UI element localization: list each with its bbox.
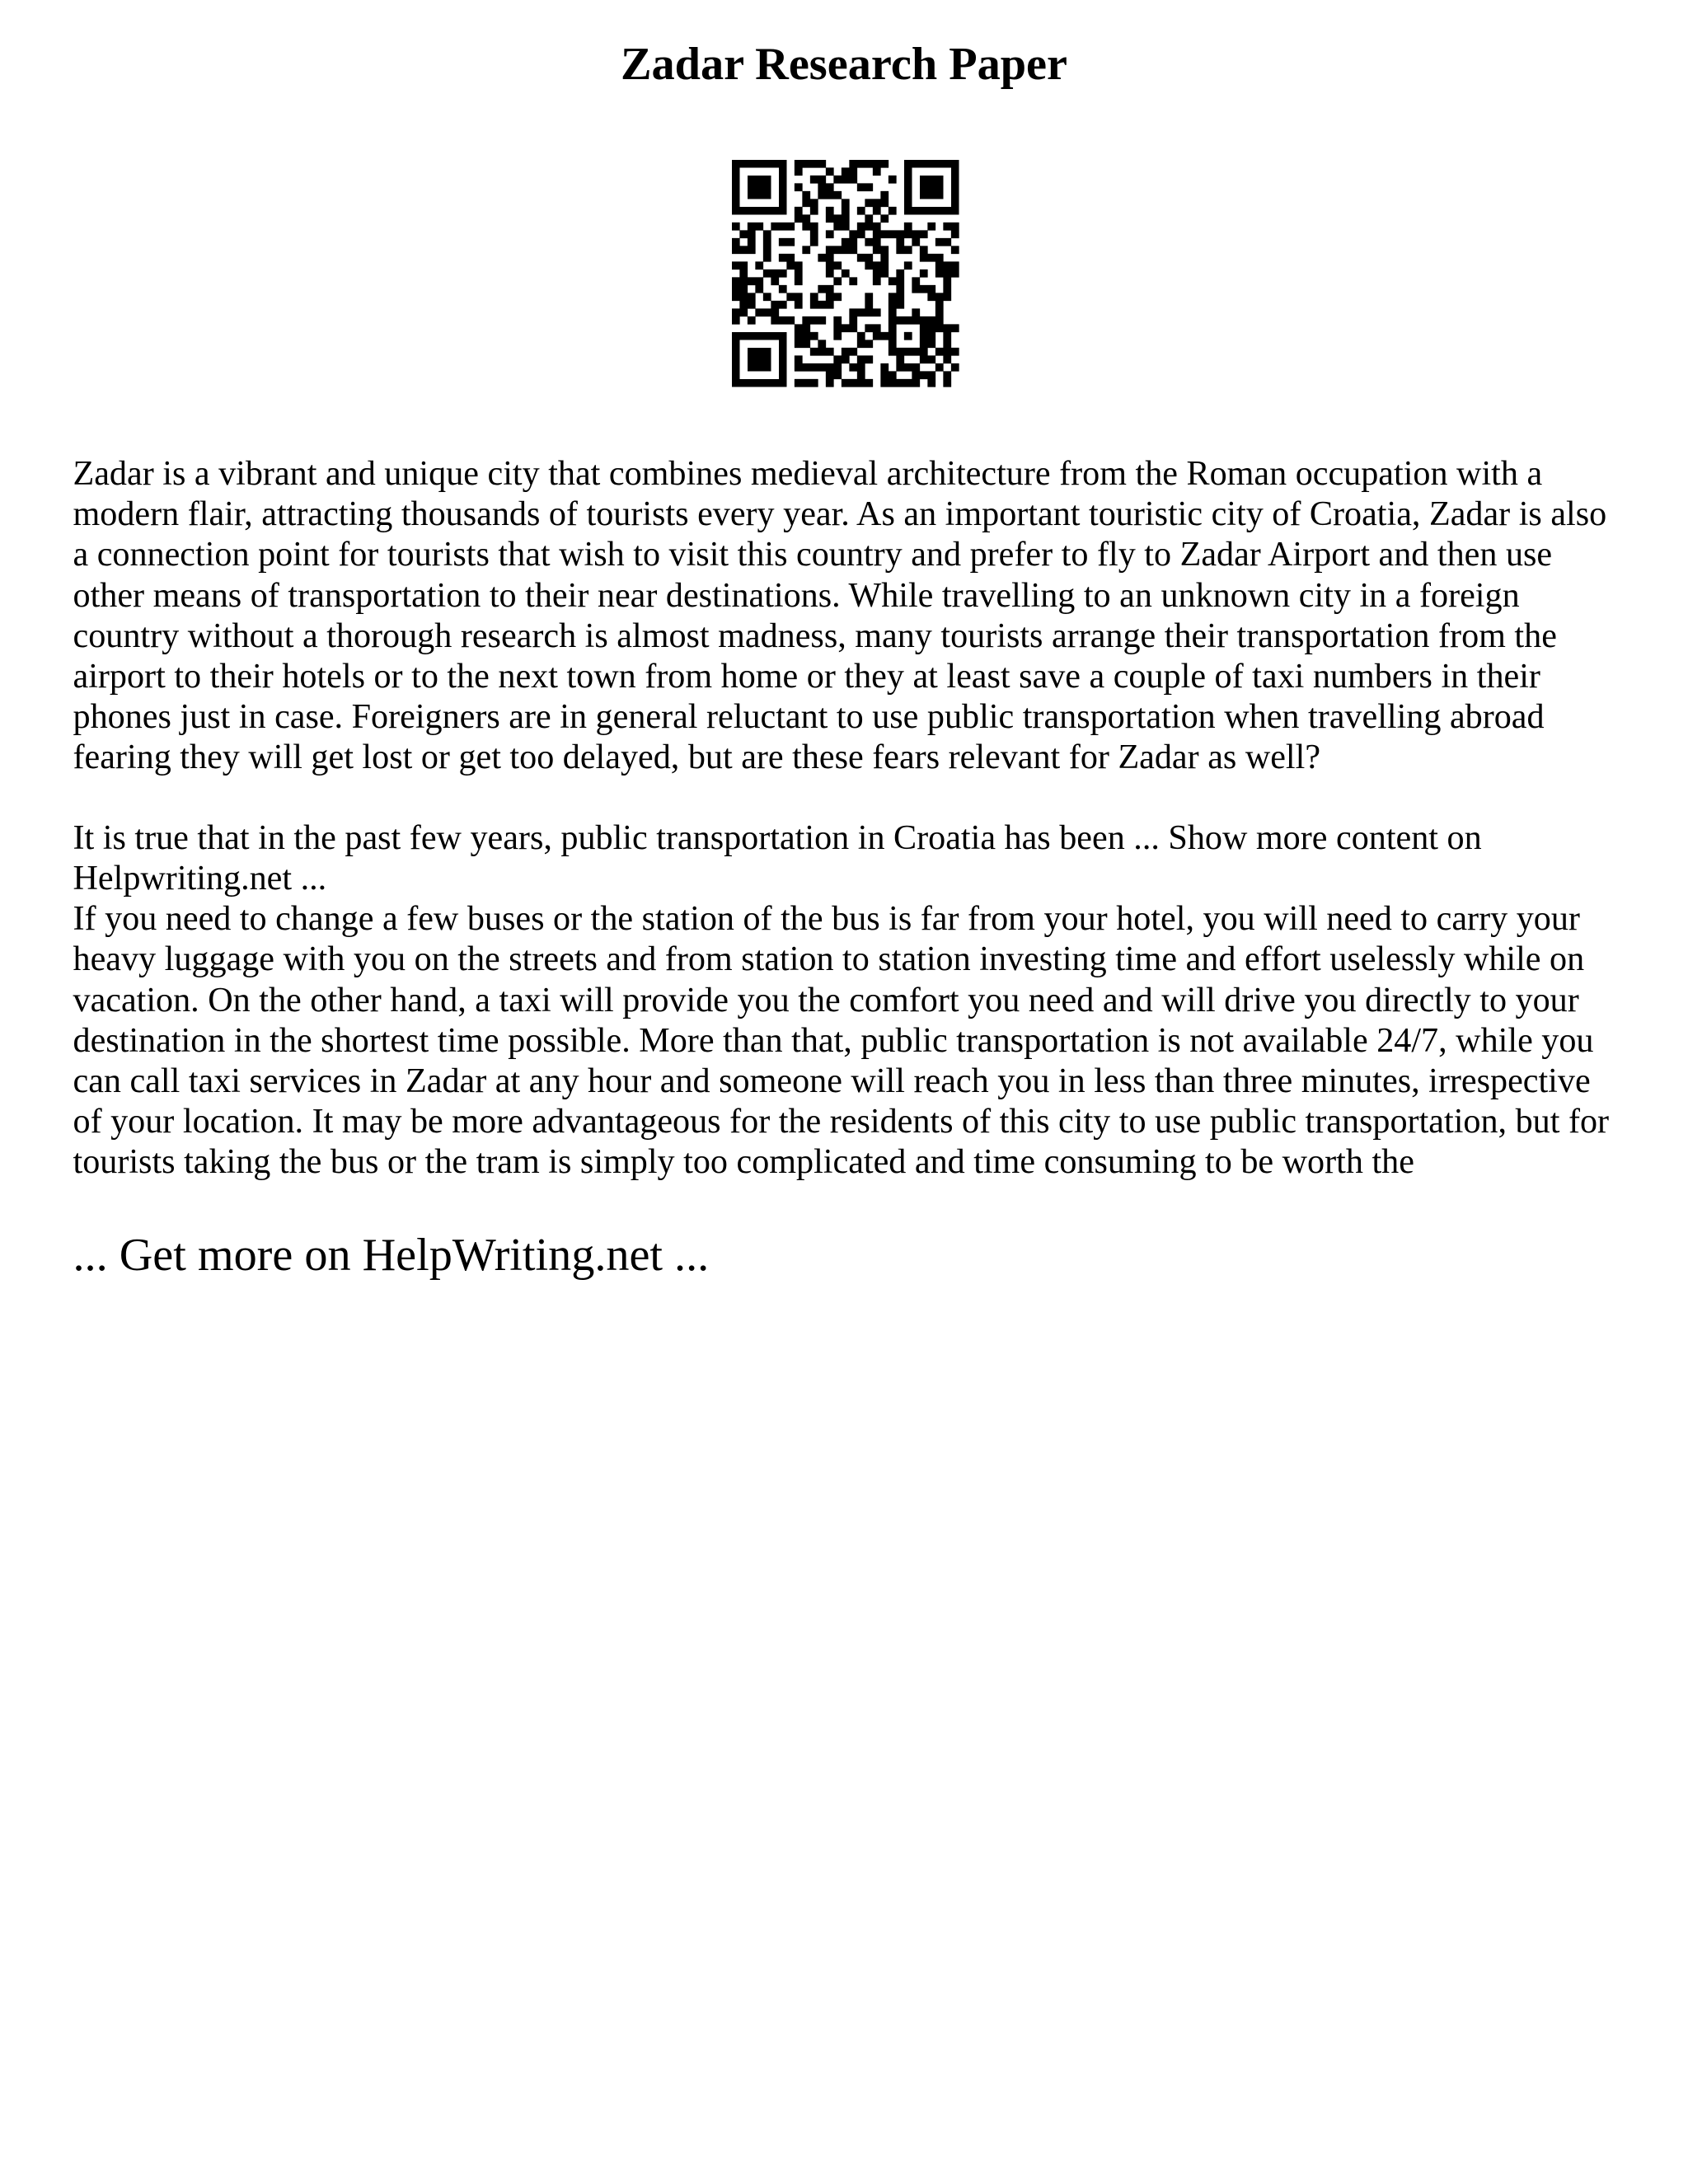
text block: second paragraph: It is true that in the past few years, public transportation in Croatia has been ... Show more content on [73, 818, 1482, 857]
text block: introduction paragraph: Zadar is a vibrant and unique city that combines medieval architecture from the Roman occupation with a [73, 454, 1542, 493]
text block: second paragraph: destination in the shortest time possible. More than that, public transportation is not available 24/7, while you [73, 1021, 1594, 1060]
text block: second paragraph: tourists taking the bus or the tram is simply too complicated and time consuming to be worth the [73, 1142, 1414, 1181]
text block: introduction paragraph: airport to their hotels or to the next town from home or they at least save a couple of taxi numbers in their [73, 657, 1540, 696]
text block: second paragraph: Helpwriting.net ... [73, 859, 326, 898]
text block: second paragraph: of your location. It may be more advantageous for the residents of this city to use public transportation, but for [73, 1102, 1609, 1141]
text block: introduction paragraph: country without a thorough research is almost madness, many tourists arrange their transportation from the [73, 616, 1557, 655]
text block: introduction paragraph: other means of transportation to their near destinations. While travelling to an unknown city in a foreign [73, 576, 1520, 615]
text block: introduction paragraph: phones just in case. Foreigners are in general reluctant to use public transportation when travelling abroad [73, 697, 1545, 736]
text block: second paragraph [73, 818, 1609, 1181]
text block: second paragraph: vacation. On the other hand, a taxi will provide you the comfort you need and will drive you directly to your [73, 981, 1579, 1019]
text block: introduction paragraph: modern flair, attracting thousands of tourists every year. As an important touristic city of Croatia, Zadar is also [73, 494, 1606, 533]
text block: second paragraph: If you need to change a few buses or the station of the bus is far from your hotel, you will need to carry your [73, 899, 1580, 938]
text block: introduction paragraph: fearing they will get lost or get too delayed, but are these fears relevant for Zadar as well? [73, 738, 1320, 776]
text block: second paragraph: can call taxi services in Zadar at any hour and someone will reach you in less than three minutes, irrespective [73, 1062, 1591, 1100]
title: Zadar Research Paper [621, 38, 1067, 89]
call to action line: ... Get more on HelpWriting.net ... [73, 1230, 709, 1281]
text block: second paragraph: heavy luggage with you on the streets and from station to station investing time and effort uselessly while on [73, 940, 1584, 978]
QR code [732, 160, 959, 387]
text block: introduction paragraph [73, 454, 1606, 776]
text block: introduction paragraph: a connection point for tourists that wish to visit this country and prefer to fly to Zadar Airport and then use [73, 535, 1552, 574]
